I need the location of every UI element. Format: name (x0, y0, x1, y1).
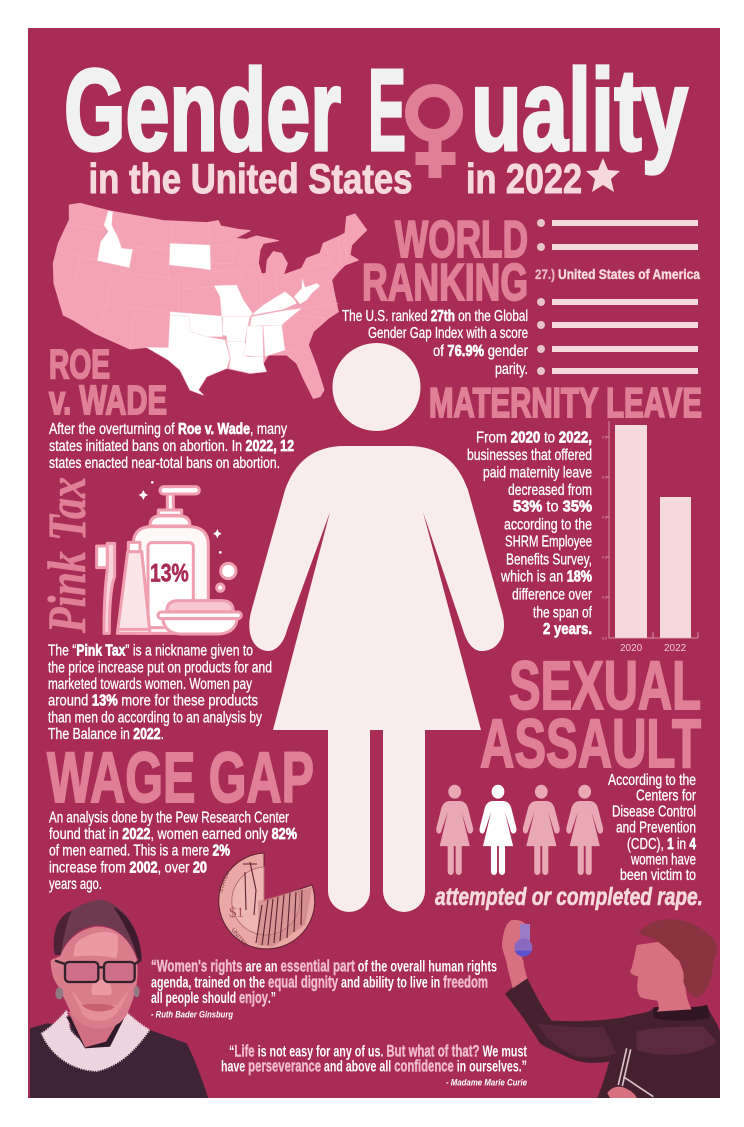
quote: Ruth Bader Ginsburg: all people should enjoy.” (151, 988, 276, 1007)
heading: wage gap: WAGE GAP (47, 739, 314, 818)
text: pink tax: marketed towards women. Women pay (48, 676, 252, 693)
text: pink tax: the price increase put on products for and (48, 659, 272, 676)
icon: four women, one in four highlighted (436, 785, 603, 875)
text: roe v. wade: states initiated bans on abortion. In 2022, 12 (49, 438, 294, 455)
heading: roe v. wade: v. WADE (49, 377, 167, 423)
text: wage gap: years ago. (49, 876, 102, 893)
heading: roe v. wade: ROE (49, 341, 110, 387)
white states with near-total bans (97, 211, 320, 395)
quote: Marie Curie: - Madame Marie Curie (446, 1078, 527, 1088)
bar chart: maternity leave: 0.5 (602, 436, 607, 440)
text: sexual assault: According to the (608, 772, 696, 789)
bar chart: maternity leave: 0.2 (602, 556, 607, 560)
text: sexual assault: women have (630, 851, 696, 868)
text: maternity leave (467, 429, 593, 638)
text: world ranking: The U.S. ranked 27th on the Global (342, 308, 528, 325)
text: world ranking: of 76.9% gender (433, 343, 529, 360)
text: maternity leave: which is an 18% (500, 569, 592, 586)
quote: Ruth Bader Ginsburg (151, 957, 497, 1020)
heading: pink tax: Pink Tax (37, 477, 97, 634)
ranking list: United States of America (558, 266, 700, 282)
text: roe v. wade (49, 421, 294, 472)
text: maternity leave: paid maternity leave (483, 465, 592, 482)
ranking list (535, 219, 700, 375)
bar chart: maternity leave: 0.0 (602, 636, 607, 640)
bar chart: maternity leave: 0.3 (602, 516, 607, 520)
text: maternity leave: decreased from (508, 482, 592, 499)
text: wage gap: found that in 2022, women earned only 82% (49, 826, 297, 843)
text: pink tax: than men do according to an analysis by (48, 709, 262, 726)
bar chart: maternity leave (602, 421, 698, 654)
quote: Marie Curie (221, 1042, 527, 1088)
heading: world ranking (362, 211, 528, 312)
title: Gender (64, 45, 341, 175)
icon: dollar coin with wedge removed (218, 853, 315, 949)
title: E (368, 45, 406, 175)
text: sexual assault: been victim to (620, 867, 696, 884)
icon: dollar coin with wedge removed: $1 (229, 905, 244, 921)
icon: toiletries: 13% (150, 560, 189, 588)
text: sexual assault: and Prevention (616, 820, 696, 837)
quote: Ruth Bader Ginsburg: - Ruth Bader Ginsburg (151, 1010, 233, 1020)
bar chart: maternity leave: 2022 (664, 643, 687, 654)
text: maternity leave: 53% to 35% (513, 499, 592, 516)
text: pink tax: The Balance in 2022. (48, 726, 164, 743)
icon: star (586, 158, 620, 192)
heading: roe v. wade (49, 341, 167, 423)
text: wage gap (49, 809, 297, 893)
text: roe v. wade: After the overturning of Roe v. Wade, many (49, 421, 287, 438)
text: world ranking: Gender Gap Index with a score (368, 325, 528, 342)
text: sexual assault: Disease Control (612, 804, 696, 821)
text: maternity leave: difference over (512, 586, 593, 603)
text: world ranking (342, 308, 529, 378)
text: pink tax: around 13% more for these products (48, 693, 258, 710)
text: maternity leave: 2 years. (543, 621, 592, 638)
text: sexual assault: (CDC), 1 in 4 (627, 836, 696, 853)
text: sexual assault: Centers for (636, 788, 697, 805)
subtitle: in 2022 (466, 155, 582, 202)
bar chart: maternity leave: 0.4 (602, 476, 607, 480)
icon: dollar coin with wedge removed: UNITED (229, 928, 248, 949)
quote: Marie Curie: “Life is not easy for any of us. But what of that? We must (229, 1042, 527, 1061)
heading: world ranking: RANKING (362, 254, 528, 312)
text: wage gap: increase from 2002, over 20 (49, 859, 207, 876)
text: maternity leave: businesses that offered (467, 447, 592, 464)
text: world ranking: parity. (495, 361, 528, 378)
illustration: Ruth Bader Ginsburg (30, 899, 208, 1098)
icon: venus symbol (412, 90, 456, 178)
text: pink tax (48, 643, 272, 743)
quote: Ruth Bader Ginsburg: agenda, trained on the equal dignity and ability to live in freedom (151, 973, 488, 992)
text: wage gap: of men earned. This is a mere 2% (49, 843, 230, 860)
text: maternity leave: Benefits Survey, (506, 551, 592, 568)
illustration: Marie Curie (502, 919, 720, 1098)
text: maternity leave: SHRM Employee (505, 534, 592, 551)
title (64, 45, 688, 175)
text: pink tax: The “Pink Tax” is a nickname given to (48, 643, 253, 660)
text: sexual assault (608, 772, 697, 884)
quote: Ruth Bader Ginsburg: “Women's rights are an essential part of the overall human rights (151, 957, 497, 976)
bar chart: maternity leave: 0.1 (602, 596, 607, 600)
state boundaries (58, 220, 347, 353)
heading: sexual assault (480, 647, 701, 782)
subtitle: in the United States (88, 155, 412, 202)
quote: Marie Curie: have perseverance and above all confidence in ourselves.” (221, 1057, 527, 1076)
text: wage gap: An analysis done by the Pew Research Center (49, 809, 289, 826)
text: maternity leave: according to the (504, 516, 592, 533)
heading: world ranking: WORLD (395, 211, 528, 269)
central woman figure (249, 343, 504, 912)
bar chart: maternity leave: 2020 (620, 643, 643, 654)
text: maternity leave: the span of (533, 604, 592, 621)
icon: toiletries (97, 481, 241, 634)
text: maternity leave: From 2020 to 2022, (476, 429, 592, 446)
text: roe v. wade: states enacted near-total bans on abortion. (49, 455, 280, 472)
ranking list: 27.) (535, 266, 555, 282)
map: abortion bans by state (53, 203, 367, 398)
icon: dollar coin with wedge removed: STATES (218, 870, 231, 894)
